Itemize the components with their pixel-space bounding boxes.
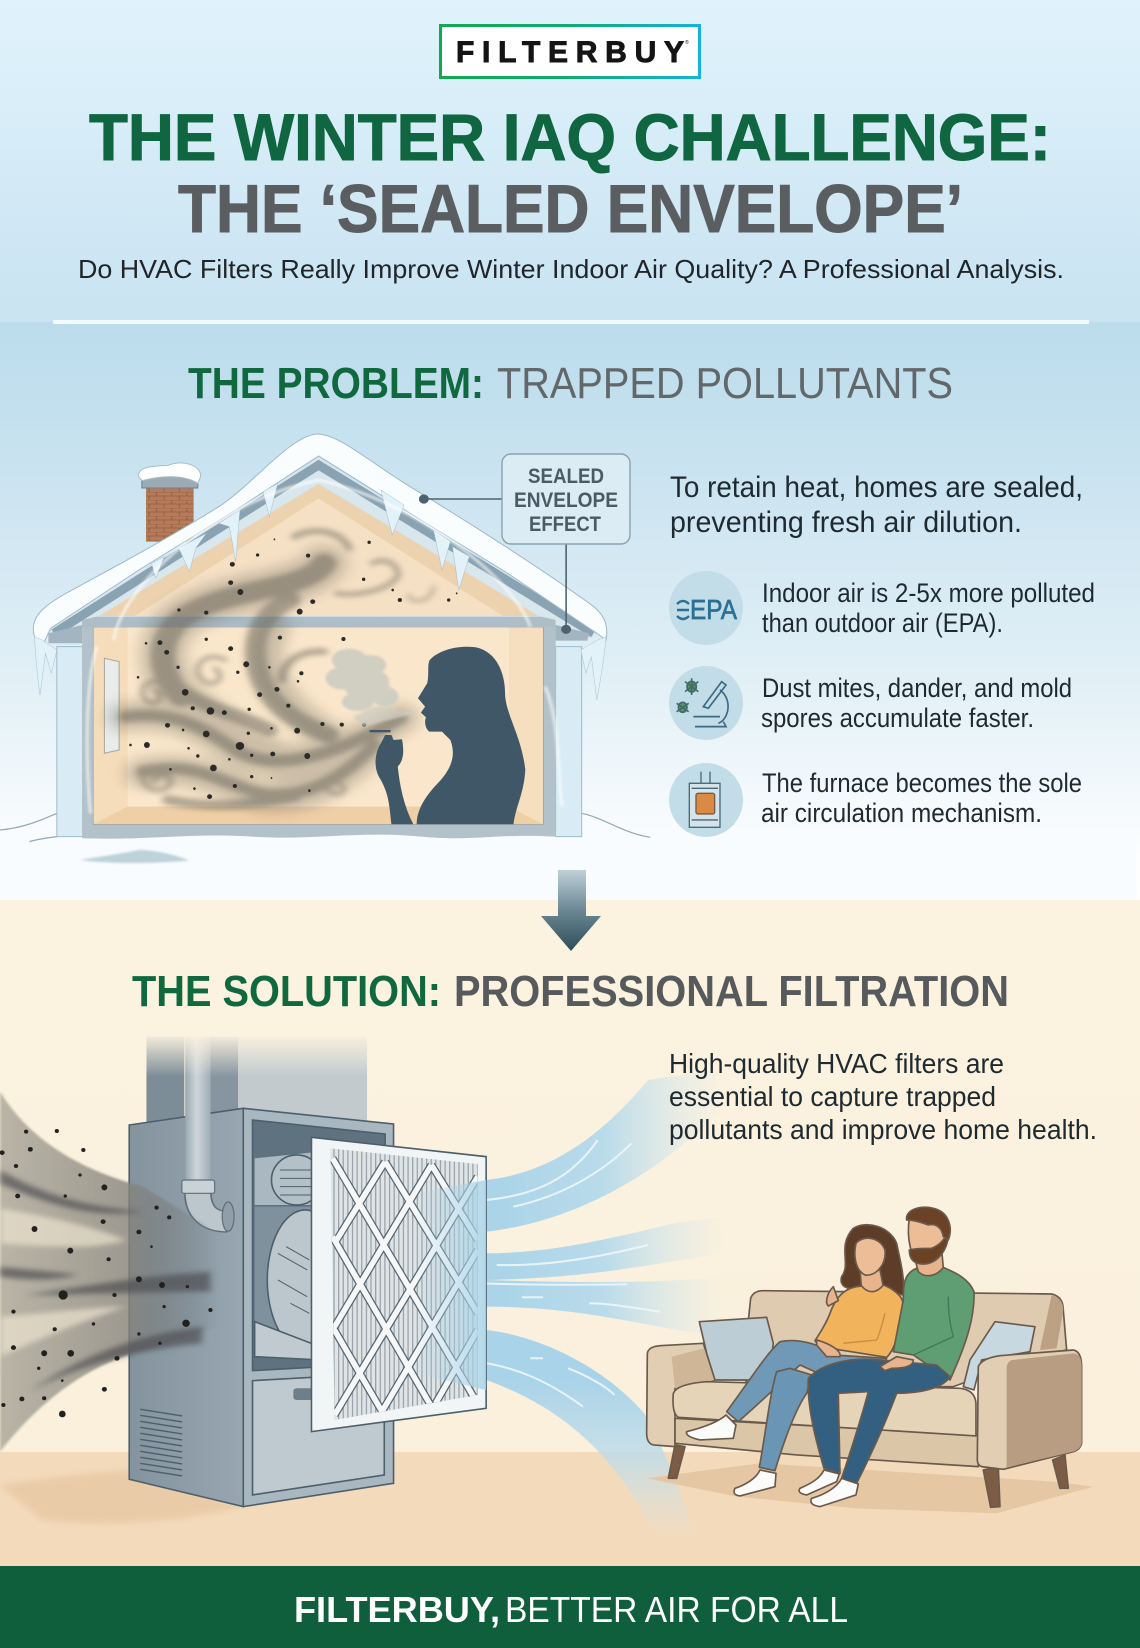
title: THE WINTER IAQ CHALLENGE: (89, 100, 1051, 174)
illustration: furnace with filter (0, 1033, 724, 1540)
fact: allergens: spores accumulate faster. (761, 703, 1034, 733)
fact: allergens (669, 666, 1072, 740)
man jeans (808, 1359, 950, 1483)
sofa shadow (647, 1463, 1093, 1513)
footer band: BETTER AIR FOR ALL (505, 1589, 848, 1630)
solution text (669, 1048, 1097, 1145)
sofa (647, 1291, 1082, 1507)
fact: furnace: air circulation mechanism. (761, 798, 1042, 828)
callout leader lines (419, 495, 571, 634)
furnace vent (140, 1409, 182, 1476)
snow ground (0, 807, 1136, 900)
title (89, 100, 1051, 247)
subtitle: Do HVAC Filters Really Improve Winter Indoor Air Quality? A Professional Analysis. (78, 254, 1064, 284)
fact: EPA: Indoor air is 2-5x more polluted (762, 578, 1095, 608)
background: winter sky header (0, 0, 1140, 322)
intro text: To retain heat, homes are sealed, (670, 471, 1083, 504)
heading: the solution (132, 967, 1009, 1016)
illustration: couple on sofa (647, 1207, 1093, 1513)
fact: EPA: than outdoor air (EPA). (762, 608, 1003, 638)
dirty air entering (0, 1092, 219, 1452)
logo: Filterbuy: FILTERBUY (456, 36, 684, 69)
duct (146, 1037, 367, 1127)
heading: the solution: THE SOLUTION: (132, 967, 441, 1016)
pollutant haze (126, 563, 400, 798)
fact: furnace (669, 763, 1082, 837)
icicles (35, 483, 606, 700)
clean air streams (486, 1070, 724, 1540)
callout: sealed envelope effect: EFFECT (529, 513, 601, 536)
background: floor (0, 1452, 1140, 1566)
heading: the solution: PROFESSIONAL FILTRATION (454, 967, 1009, 1016)
attic (82, 484, 556, 627)
callout: sealed envelope effect: SEALED (528, 465, 604, 488)
arrow: problem to solution (541, 870, 601, 951)
logo: Filterbuy: ® (685, 39, 689, 46)
title: THE ‘SEALED ENVELOPE’ (178, 171, 963, 247)
air highlight lines (461, 1140, 660, 1407)
furnace body (129, 1108, 394, 1507)
fact: EPA (669, 571, 1095, 645)
man (799, 1207, 974, 1507)
solution text: pollutants and improve home health. (669, 1114, 1097, 1145)
pollutant swirls (126, 531, 434, 805)
footer band (0, 1566, 1140, 1648)
smoke cloud (325, 649, 419, 727)
fact: furnace: The furnace becomes the sole (762, 768, 1082, 798)
corner ice columns (57, 647, 582, 837)
chimney (139, 463, 201, 542)
intro text: preventing fresh air dilution. (670, 506, 1022, 539)
pleated filter (311, 1137, 486, 1432)
illustration: sealed house with trapped pollutants (0, 434, 1136, 900)
callout: sealed envelope effect (502, 454, 630, 544)
logo: Filterbuy (440, 26, 700, 78)
background: solution section (0, 900, 1140, 1452)
roof underside (48, 457, 598, 643)
background: problem section (0, 322, 1140, 900)
solution text: essential to capture trapped (669, 1081, 996, 1112)
room interior (93, 627, 543, 824)
pollutant particles (129, 538, 458, 799)
woman silhouette smoking (370, 647, 525, 824)
heading: the problem: TRAPPED POLLUTANTS (497, 359, 953, 408)
solution text: High-quality HVAC filters are (669, 1048, 1004, 1079)
floor shadow (0, 1470, 244, 1523)
heading: the problem (188, 359, 953, 408)
duct top fade (143, 1033, 370, 1077)
callout: sealed envelope effect: ENVELOPE (514, 489, 618, 512)
divider (53, 320, 1089, 324)
woman jeans (727, 1341, 887, 1422)
heading: the problem: THE PROBLEM: (188, 359, 484, 408)
fact: allergens: Dust mites, dander, and mold (762, 673, 1072, 703)
house wall frame (82, 620, 556, 839)
translucent ice shell (87, 480, 562, 813)
snow on roof (33, 434, 607, 647)
footer band: FILTERBUY, (294, 1589, 500, 1630)
intro text (670, 471, 1083, 539)
condensate pipe (182, 1037, 234, 1231)
woman (686, 1225, 904, 1496)
fact: EPA: EPA (690, 594, 737, 625)
